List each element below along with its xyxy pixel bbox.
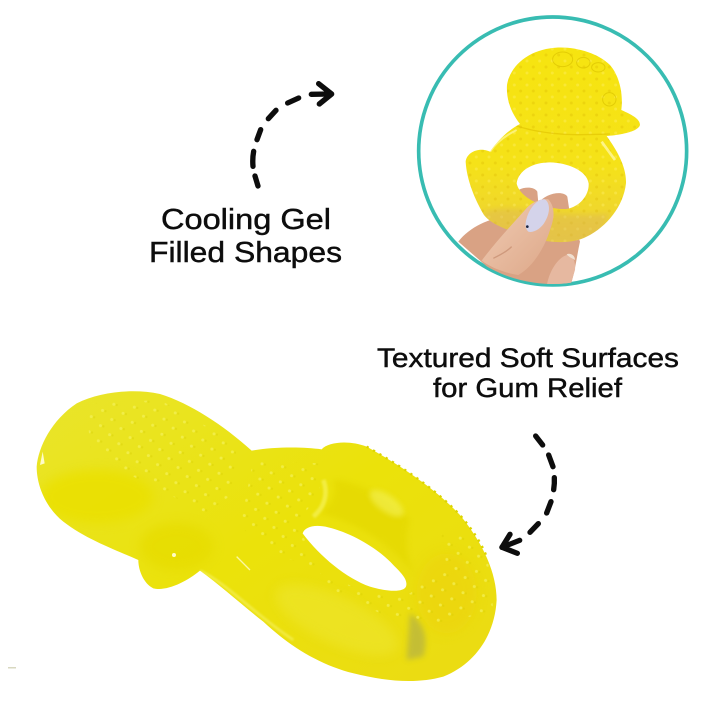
teether body — [37, 391, 497, 681]
textured dots — [87, 400, 493, 623]
callout: cooling gel arrow — [253, 84, 332, 186]
shading — [39, 468, 428, 662]
callout: textured surfaces arrow — [502, 436, 554, 553]
duck teether — [460, 43, 643, 247]
hat bubbles — [553, 52, 616, 106]
text: textured soft surfaces for gum relief — [377, 343, 679, 403]
text: cooling gel filled shapes: Filled Shapes — [149, 237, 342, 269]
text: textured soft surfaces for gum relief: Textured Soft Surfaces — [377, 343, 679, 373]
text: textured soft surfaces for gum relief: for Gum Relief — [433, 373, 623, 403]
thumb and nail — [482, 199, 554, 275]
panel: duck teether photo in circle — [419, 17, 687, 287]
ridge bumps — [367, 447, 487, 557]
hand behind teether — [458, 188, 580, 287]
circle frame — [419, 17, 687, 285]
text: cooling gel filled shapes — [149, 204, 342, 269]
speck — [8, 667, 16, 668]
text: cooling gel filled shapes: Cooling Gel — [161, 204, 331, 236]
panel: large teether — [37, 391, 497, 681]
highlights — [40, 452, 45, 465]
